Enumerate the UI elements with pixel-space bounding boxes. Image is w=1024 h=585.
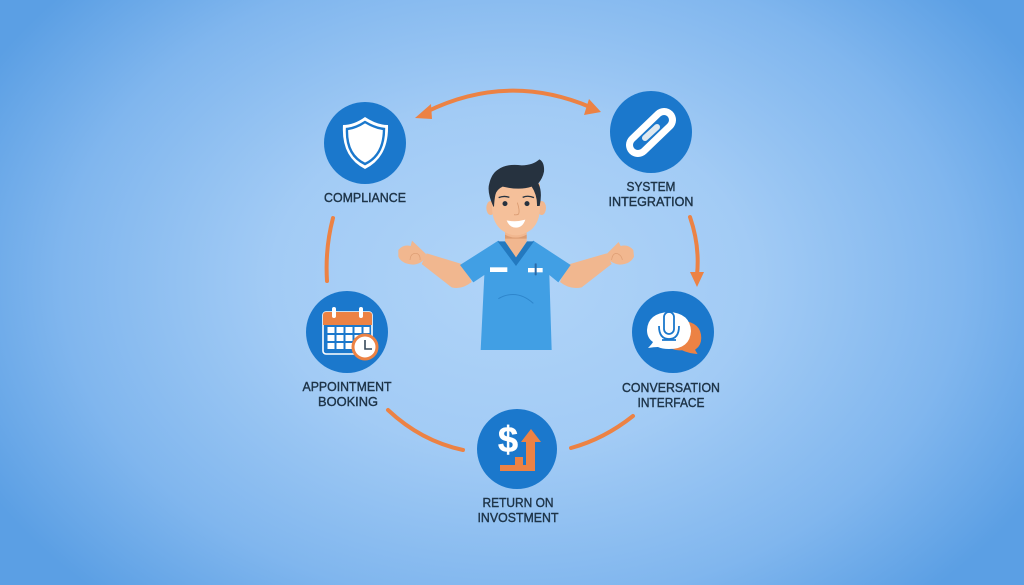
icon: calendar with clock xyxy=(323,307,377,359)
nose xyxy=(514,203,519,215)
label: appointment booking: BOOKING xyxy=(318,394,378,409)
appointment circle xyxy=(306,291,388,373)
icon: speech bubbles with microphone xyxy=(647,312,702,355)
label: system integration xyxy=(608,179,694,209)
node: appointment booking xyxy=(302,291,392,409)
right hand xyxy=(607,242,634,265)
label: conversation interface: CONVERSATION xyxy=(622,380,720,395)
arc: appointment booking to compliance xyxy=(327,218,333,281)
character: medical worker xyxy=(398,159,634,350)
face xyxy=(492,183,540,235)
left arm xyxy=(422,253,472,288)
label: return on investment xyxy=(478,495,559,525)
smile xyxy=(507,220,525,228)
arrow: system integration to conversation interface xyxy=(690,217,704,287)
scrub top xyxy=(460,241,571,350)
label: return on investment: RETURN ON xyxy=(482,495,554,510)
system integration circle xyxy=(610,91,692,173)
arrow: compliance to system integration xyxy=(415,91,601,119)
conversation circle xyxy=(632,291,714,373)
label: conversation interface: INTERFACE xyxy=(638,395,705,410)
node: system integration xyxy=(608,91,694,209)
label: compliance: COMPLIANCE xyxy=(324,190,406,205)
label: system integration: INTEGRATION xyxy=(608,194,694,209)
pocket with pen xyxy=(528,263,543,275)
roi circle xyxy=(477,409,557,489)
eyebrows xyxy=(499,196,534,198)
right arm xyxy=(560,253,612,288)
compliance circle xyxy=(324,102,406,184)
arc: conversation interface to return on investment xyxy=(571,416,633,448)
node: compliance xyxy=(324,102,406,205)
node: return on investment xyxy=(477,409,559,525)
label: appointment booking: APPOINTMENT xyxy=(302,379,392,394)
node: conversation interface xyxy=(622,291,720,410)
label: system integration: SYSTEM xyxy=(626,179,676,194)
hair xyxy=(489,159,544,207)
label: appointment booking xyxy=(302,379,392,409)
neck xyxy=(505,230,527,258)
eyes xyxy=(502,201,507,206)
ears xyxy=(486,201,495,215)
name badge xyxy=(490,267,507,272)
label: conversation interface xyxy=(622,380,720,410)
left hand xyxy=(398,241,426,265)
arc: return on investment to appointment booking xyxy=(388,410,463,450)
icon: chain link xyxy=(638,120,664,145)
cycle arrows xyxy=(327,91,704,450)
collar xyxy=(498,241,534,266)
shirt fold xyxy=(498,294,533,303)
icon: dollar and growth arrow: $ xyxy=(498,419,518,460)
label: return on investment: INVOSTMENT xyxy=(478,510,559,525)
icon: shield xyxy=(343,117,388,169)
